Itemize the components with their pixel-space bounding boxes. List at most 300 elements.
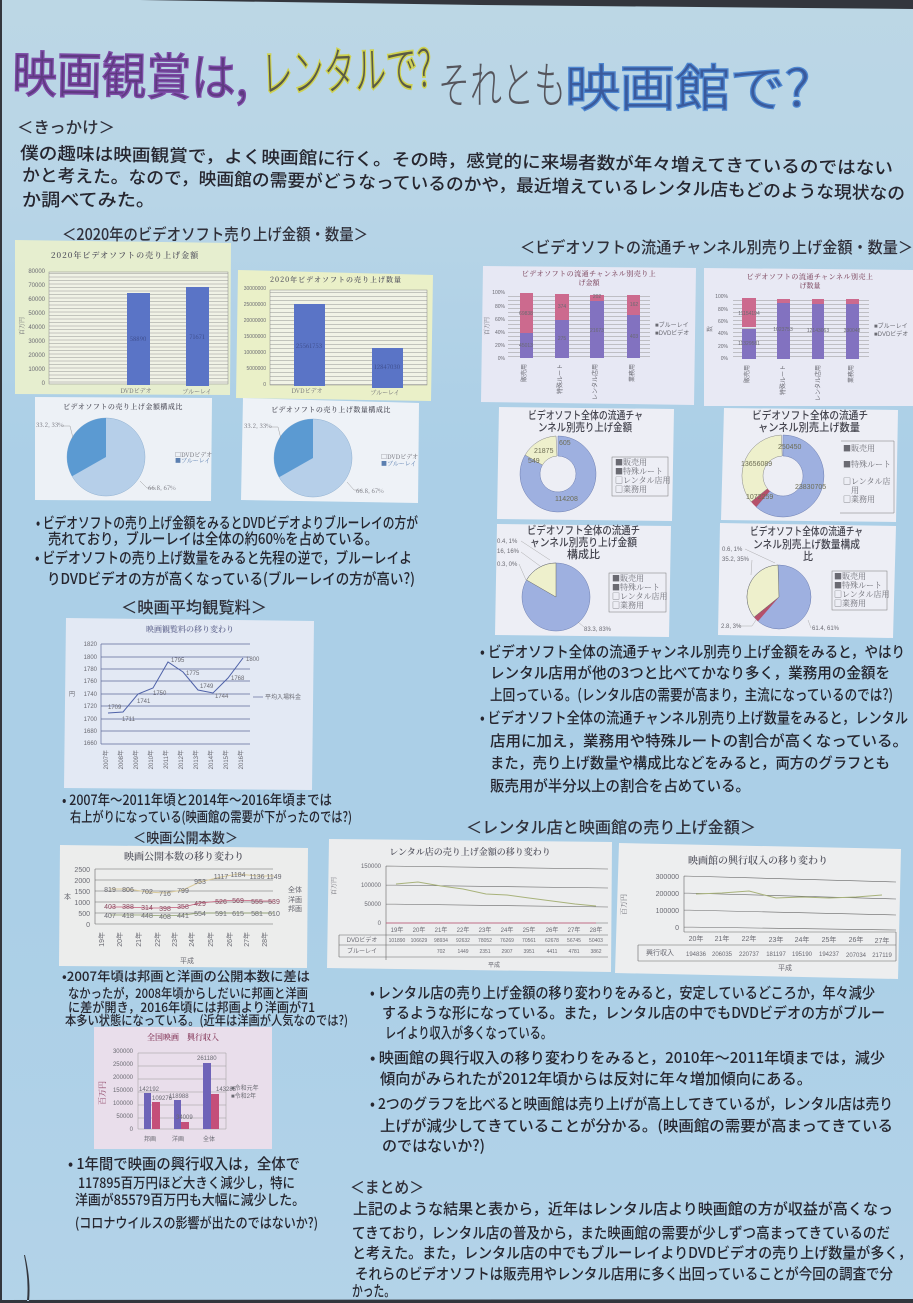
- bar chart: 2020 sales amount: 2020年ビデオソフトの売り上げ金額: [51, 250, 199, 261]
- pie chart: sales amount share: ■ブルーレイ: [175, 456, 210, 465]
- bar chart: box office: 100000: [113, 1101, 134, 1107]
- line chart: film releases: 1000: [74, 900, 90, 907]
- line chart: ticket price: 2011年: [162, 750, 170, 769]
- text: ticket price note: [62, 790, 352, 827]
- line chart: ticket price: 2008年: [117, 750, 125, 769]
- line chart: film releases: 358: [177, 904, 189, 911]
- stacked bar chart: channel amount: 21673: [590, 328, 604, 334]
- line chart with table: rental sales: 22年: [457, 926, 469, 934]
- stacked bar chart: channel quantity: レンタル店用: [814, 365, 822, 401]
- line chart: ticket price: 1768: [231, 676, 245, 682]
- line chart: film releases: 953: [194, 879, 206, 886]
- heading: きっかけ: ＜きっかけ＞: [17, 114, 115, 138]
- line chart with table: cinema revenue: 300000: [656, 874, 679, 881]
- line chart: ticket price: 2016年: [237, 750, 245, 769]
- line chart with table: cinema revenue: 0: [675, 925, 679, 932]
- donut chart: channel quantity: □レンタル店: [843, 476, 890, 487]
- line chart: film releases: 邦画: [288, 904, 302, 913]
- donut chart: channel amount: ビデオソフト全体の流通チャ: [528, 407, 643, 423]
- stacked bar chart: channel quantity: 業務用: [847, 365, 855, 383]
- heading: film releases: ＜映画公開本数＞: [133, 828, 238, 848]
- pie chart: sales quantity share: 33.2, 33%: [244, 421, 272, 430]
- pie chart: channel amount share: 0.3, 0%: [497, 562, 518, 568]
- line chart with table: rental sales: 23年: [479, 926, 491, 934]
- heading: rental and cinema revenue: ＜レンタル店と映画館の売り上げ金額＞: [466, 814, 756, 838]
- pie chart: channel amount share: ■特殊ルート: [612, 582, 660, 593]
- line chart with table: rental sales: 28年: [590, 926, 602, 934]
- section: きっかけ: [17, 114, 905, 212]
- text: film release notes: •2007年頃は邦画と洋画の公開本数に差は: [62, 966, 310, 985]
- stacked bar chart: channel quantity: 330048: [844, 328, 861, 334]
- text: film release notes: 本多い状態になっている。(近年は洋画が人気なのでは?): [65, 1010, 348, 1029]
- stacked bar chart: channel amount: 0%: [498, 356, 506, 362]
- stacked bar chart: channel quantity: 11329581: [738, 341, 760, 347]
- line chart: ticket price: 2009年: [132, 750, 140, 769]
- line chart: ticket price: 1820: [84, 642, 98, 648]
- line chart with table: cinema revenue: 207034: [846, 953, 867, 959]
- bar chart: 2020 sales quantity: DVDビデオ: [291, 386, 323, 395]
- line chart: ticket price: 2015年: [222, 750, 230, 769]
- bar chart: 2020 sales quantity: 0: [263, 382, 266, 388]
- line chart: film releases: 388: [122, 904, 134, 911]
- line chart: film releases: 539: [268, 899, 280, 906]
- line chart: ticket price: 1709: [108, 705, 122, 711]
- line chart with table: cinema revenue: 映画館の興行収入の移り変わり: [688, 852, 828, 867]
- bar chart: 2020 sales amount: 70000: [28, 283, 46, 289]
- donut chart: channel quantity: ■販売用: [843, 443, 875, 454]
- text: film release notes: なかったが，2008年頃からしだいに邦画と洋画: [68, 983, 308, 1002]
- line chart: ticket price: 1749: [200, 684, 214, 690]
- line chart: ticket price: 2012年: [177, 750, 185, 769]
- donut chart: channel quantity: 13656089: [741, 461, 772, 468]
- line chart with table: rental sales: 78052: [478, 938, 492, 944]
- stacked bar chart: channel amount: 80%: [495, 304, 506, 310]
- stacked bar chart: channel amount: レンタル店用: [591, 364, 599, 400]
- bar chart: box office: 全体: [203, 1135, 215, 1143]
- line chart: film releases: 1184: [230, 872, 246, 879]
- line chart: film releases: 591: [215, 911, 227, 918]
- line chart: ticket price: 1795: [171, 658, 185, 664]
- title: レンタルで?: [260, 29, 432, 107]
- bar chart: 2020 sales quantity: 12847030: [374, 362, 401, 371]
- line chart: ticket price: 1800: [84, 655, 98, 661]
- line chart: film releases: 403: [104, 904, 116, 911]
- donut chart: channel amount: 605: [559, 440, 571, 447]
- bar chart: 2020 sales amount: [15, 240, 231, 396]
- bar chart: 2020 sales amount: 60000: [28, 297, 46, 303]
- stacked bar chart: channel quantity: 60%: [718, 319, 729, 325]
- intro text: 僕の趣味は映画観賞で，よく映画館に行く。その時，感覚的に来場者数が年々増えてきているのではない: [20, 140, 893, 180]
- pie chart: channel amount share: ャンネル別売り上げ金額: [530, 535, 637, 549]
- stacked bar chart: channel amount: 20%: [495, 343, 506, 349]
- line chart: film releases: 2500: [74, 867, 90, 874]
- line chart: ticket price: 1740: [84, 692, 98, 698]
- line chart: film releases: 407: [104, 913, 116, 920]
- stacked bar chart: channel quantity: 40%: [718, 331, 729, 337]
- pie chart: sales quantity share: □DVDビデオ: [381, 452, 418, 461]
- line chart with table: rental sales: ブルーレイ: [347, 947, 377, 955]
- donut chart: channel quantity: ■特殊ルート: [843, 459, 891, 470]
- line chart with table: rental sales: 4411: [547, 949, 558, 955]
- line chart with table: cinema revenue: 22年: [742, 934, 756, 943]
- bar chart: 2020 sales amount: 20000: [28, 353, 46, 359]
- line chart with table: cinema revenue: 百万円: [619, 894, 629, 915]
- bar chart: 2020 sales quantity: 2020年ビデオソフトの売り上げ数量: [270, 275, 402, 285]
- line chart: film releases: 1136: [249, 874, 265, 881]
- line chart with table: rental sales: 27年: [568, 926, 580, 934]
- pie chart: channel amount share: [495, 523, 671, 637]
- stacked bar chart: channel quantity: [704, 268, 913, 406]
- line chart: ticket price: [64, 618, 314, 790]
- line chart: film releases: 555: [251, 899, 263, 906]
- text: box office note: 117895百万円ほど大きく減少し，特に: [78, 1173, 295, 1193]
- title: 映画館で?: [565, 49, 810, 121]
- line chart: ticket price: 1741: [137, 699, 151, 705]
- line chart with table: rental sales: 20年: [413, 926, 425, 934]
- stacked bar chart: channel amount: ■DVDビデオ: [655, 329, 689, 337]
- text: box office note: [68, 1153, 318, 1233]
- bar chart: 2020 sales amount: DVDビデオ: [120, 386, 152, 395]
- line chart: film releases: 27年: [242, 932, 251, 947]
- bar chart: box office: 300000: [113, 1049, 134, 1055]
- bar chart: box office: 0: [130, 1127, 134, 1133]
- line chart with table: rental sales: 98934: [434, 938, 448, 944]
- line chart with table: rental sales: 62678: [545, 938, 559, 944]
- stacked bar chart: channel amount: [481, 266, 696, 405]
- donut chart: channel amount: ンネル別売り上げ金額: [538, 419, 632, 435]
- stacked bar chart: channel amount: 特殊ルート: [556, 364, 564, 394]
- line chart with table: cinema revenue: 興行収入: [646, 948, 674, 957]
- line chart: film releases: 500: [78, 911, 90, 918]
- line chart: film releases: 全体: [288, 885, 302, 894]
- stacked bar chart: channel amount: 69838: [519, 311, 533, 317]
- donut chart: channel quantity: [721, 407, 898, 522]
- donut chart: channel amount: 114208: [555, 496, 578, 503]
- line chart: ticket price: 映画観覧料の移り変わり: [146, 624, 234, 635]
- bar chart: 2020 sales amount: ブルーレイ: [182, 387, 212, 396]
- line chart: ticket price: 1800: [246, 657, 260, 663]
- line chart with table: rental sales: 100000: [361, 883, 382, 889]
- stacked bar chart: channel amount: 100%: [492, 290, 506, 296]
- text: box office note: • 1年間で映画の興行収入は，全体で: [68, 1153, 300, 1174]
- text: ticket price note: 右上がりになっている(映画館の需要が下がったのでは?): [70, 807, 352, 827]
- bar chart: 2020 sales quantity: 5000000: [247, 366, 266, 372]
- bar chart: 2020 sales quantity: 20000000: [244, 318, 266, 324]
- line chart: ticket price: 1744: [215, 694, 229, 700]
- line chart with table: rental sales: 56745: [567, 938, 581, 944]
- pie chart: channel quantity share: 2.8, 3%: [721, 624, 742, 630]
- donut chart: channel amount: 549: [528, 458, 540, 465]
- stacked bar chart: channel amount: 60%: [495, 317, 506, 323]
- line chart: film releases: 25年: [206, 932, 215, 947]
- line chart with table: cinema revenue: 194836: [686, 952, 707, 958]
- bar chart: box office: 250000: [113, 1062, 134, 1068]
- line chart: film releases: 314: [141, 905, 153, 912]
- pie chart: channel quantity share: ■販売用: [834, 571, 866, 582]
- stacked bar chart: channel quantity: 100%: [715, 294, 729, 300]
- line chart with table: rental sales: 3951: [523, 949, 535, 955]
- pie chart: channel amount share: □業務用: [612, 600, 644, 611]
- line chart: film releases: 581: [251, 911, 263, 918]
- pie chart: sales amount share: □DVDビデオ: [175, 450, 212, 459]
- line chart with table: rental sales: 平成: [488, 961, 500, 969]
- line chart: film releases: 1500: [74, 889, 90, 896]
- bar chart: box office: ■令和元年: [231, 1084, 259, 1092]
- line chart: ticket price: 2014年: [207, 750, 215, 769]
- stacked bar chart: channel quantity: ■DVDビデオ: [874, 330, 908, 338]
- intro text: か調べてみた。: [22, 187, 155, 212]
- text: channel notes: また，売り上げ数量や構成比などをみると，両方のグラフとも: [490, 752, 890, 773]
- line chart with table: rental sales: 26年: [546, 926, 558, 934]
- bar chart: 2020 sales amount: 71671: [189, 332, 205, 341]
- line chart: film releases: 21年: [134, 932, 143, 947]
- line chart with table: rental sales: 702: [437, 949, 445, 955]
- line chart with table: rental sales: 1449: [457, 949, 469, 955]
- line chart with table: cinema revenue: 27年: [875, 936, 889, 945]
- text: ticket price note: • 2007年～2011年頃と2014年～2016年頃までは: [62, 790, 332, 810]
- conclusion text: 上記のような結果と表から，近年はレンタル店より映画館の方が収益が高くなっ: [353, 1198, 893, 1219]
- title: それとも: [438, 46, 566, 118]
- bar chart: box office: ■令和2年: [231, 1092, 256, 1100]
- stacked bar chart: channel quantity: 20%: [718, 344, 729, 350]
- text: rental and cinema notes: [370, 982, 893, 1156]
- bar chart: box office: 邦画: [144, 1135, 156, 1143]
- line chart: film releases: 1149: [266, 874, 282, 881]
- donut chart: channel quantity: 1072259: [746, 494, 773, 501]
- text: sales notes: • ビデオソフトの売り上げ金額をみるとDVDビデオよりブルーレイの方が: [36, 512, 418, 533]
- text: sales notes: 売れており，ブルーレイは全体の約60%を占めている。: [48, 528, 378, 549]
- line chart: film releases: 洋画: [288, 895, 302, 904]
- bar chart: box office: 261180: [197, 1056, 217, 1062]
- bar chart: box office: [94, 1027, 272, 1149]
- text: channel notes: レンタル店用が他の3つと比べてかなり多く，業務用の金額を: [490, 662, 890, 683]
- stacked bar chart: channel amount: 45013: [519, 343, 533, 349]
- bar chart: 2020 sales quantity: 25561753: [296, 341, 322, 350]
- heading: まとめ: ＜まとめ＞: [350, 1174, 424, 1198]
- text: channel notes: [480, 641, 908, 796]
- text: film release notes: に差が開き，2016年頃には邦画より洋画が71: [68, 997, 315, 1016]
- pie chart: channel quantity share: 0.6, 1%: [722, 547, 743, 553]
- pie chart: channel amount share: 83.3, 83%: [584, 627, 612, 633]
- bar chart: 2020 sales amount: 50000: [28, 311, 46, 317]
- stacked bar chart: channel amount: 業務用: [628, 364, 636, 382]
- pie chart: channel quantity share: ビデオソフト全体の流通チャ: [750, 524, 863, 538]
- pie chart: sales quantity share: ビデオソフトの売り上げ数量構成比: [271, 405, 391, 415]
- line chart: film releases: 408: [159, 914, 171, 921]
- donut chart: channel amount: ■販売用: [615, 457, 647, 468]
- line chart: film releases: 806: [122, 887, 134, 894]
- text: channel notes: 販売用が半分以上の割合を占めている。: [490, 775, 750, 796]
- stacked bar chart: channel quantity: 特殊ルート: [779, 365, 787, 395]
- pie chart: sales amount share: 66.8, 67%: [148, 483, 176, 492]
- line chart: film releases: [59, 845, 308, 968]
- line chart with table: cinema revenue: 100000: [656, 908, 679, 915]
- text: rental and cinema notes: のではないか?): [382, 1135, 485, 1156]
- line chart with table: rental sales: 24年: [501, 926, 513, 934]
- pie chart: sales amount share: ビデオソフトの売り上げ金額構成比: [63, 402, 183, 412]
- donut chart: channel amount: ■特殊ルート: [615, 466, 663, 477]
- bar chart: box office: 百万円: [97, 1081, 108, 1105]
- line chart: ticket price: 1711: [122, 717, 136, 723]
- line chart: film releases: 610: [268, 911, 280, 918]
- line chart with table: cinema revenue: 26年: [849, 935, 863, 944]
- text: sales notes: りDVDビデオの方が高くなっている(ブルーレイの方が高い?): [47, 568, 415, 589]
- line chart: ticket price: 円: [69, 691, 75, 698]
- bar chart: 2020 sales quantity: 25000000: [244, 302, 266, 308]
- line chart with table: cinema revenue: 23年: [769, 935, 783, 944]
- line chart with table: cinema revenue: 220737: [739, 952, 760, 958]
- line chart: film releases: 22年: [153, 932, 162, 947]
- stacked bar chart: channel amount: 374: [558, 304, 566, 310]
- stacked bar chart: channel quantity: 1023753: [773, 327, 793, 333]
- line chart: film releases: 819: [104, 887, 116, 894]
- pie chart: channel amount share: 構成比: [567, 547, 600, 561]
- line chart: film releases: 20年: [115, 932, 124, 947]
- line chart: ticket price: 2007年: [102, 750, 110, 769]
- pie chart: channel quantity share: ■特殊ルート: [834, 580, 882, 591]
- line chart with table: rental sales: レンタル店の売り上げ金額の移り変わり: [389, 845, 551, 858]
- line chart with table: rental sales: 21年: [435, 926, 447, 934]
- line chart with table: rental sales: 百万円: [329, 877, 338, 895]
- bar chart: box office: 50000: [116, 1114, 134, 1120]
- stacked bar chart: channel amount: 40%: [495, 330, 506, 336]
- stacked bar chart: channel quantity: 0%: [721, 356, 729, 362]
- line chart with table: cinema revenue: 181197: [766, 952, 786, 958]
- line chart: film releases: 702: [141, 889, 153, 896]
- line chart: film releases: 24年: [187, 932, 196, 947]
- title: [12, 29, 810, 121]
- pie chart: channel amount share: ビデオソフト全体の流通チ: [527, 523, 640, 537]
- text: channel notes: 店用に加え，業務用や特殊ルートの割合が高くなっている。: [490, 730, 908, 751]
- line chart: film releases: 28年: [260, 932, 269, 947]
- bar chart: box office: 洋画: [172, 1135, 184, 1143]
- line chart: film releases: 716: [159, 891, 171, 898]
- bar chart: 2020 sales quantity: 10000000: [244, 350, 266, 356]
- stacked bar chart: channel amount: 162: [630, 302, 638, 308]
- line chart with table: cinema revenue: 平成: [778, 963, 792, 972]
- donut chart: channel quantity: 用: [851, 485, 859, 496]
- heading: average ticket price: ＜映画平均観覧料＞: [121, 594, 267, 618]
- bar chart: 2020 sales amount: 40000: [28, 325, 46, 331]
- line chart with table: rental sales: 150000: [361, 864, 382, 870]
- line chart with table: rental sales: 92632: [456, 938, 470, 944]
- donut chart: channel amount: □レンタル店用: [615, 475, 670, 486]
- bar chart: 2020 sales amount: 58890: [130, 334, 147, 343]
- intro text: かと考えた。なので，映画館の需要がどうなっているのかや，最近増えているレンタル店もどのような現状なの: [22, 162, 905, 205]
- title: 映画観賞は,: [12, 35, 249, 111]
- text: rental and cinema notes: 上げが減少してきていることが分かる。(映画館の需要が高まってきている: [380, 1115, 893, 1136]
- line chart with table: rental sales: 2351: [479, 949, 491, 955]
- text: film release notes: [62, 966, 348, 1029]
- line chart: ticket price: 2013年: [192, 750, 200, 769]
- bar chart: box office: 143285: [216, 1087, 237, 1093]
- bar chart: 2020 sales amount: 0: [42, 381, 46, 387]
- line chart with table: rental sales: [327, 839, 612, 972]
- stacked bar chart: channel amount: 百万円: [482, 317, 491, 335]
- stacked bar chart: channel amount: ビデオソフトの流通チャンネル別売り上: [522, 269, 656, 279]
- pie chart: channel quantity share: [718, 523, 896, 638]
- line chart: ticket price: 1775: [186, 671, 200, 677]
- line chart with table: rental sales: 25年: [523, 926, 535, 934]
- stacked bar chart: channel amount: 202: [593, 294, 601, 300]
- line chart with table: rental sales: 50000: [364, 902, 382, 908]
- stacked bar chart: channel quantity: 販売用: [743, 365, 751, 383]
- pie chart: sales amount share: 33.2, 33%: [36, 420, 64, 429]
- line chart: ticket price: 1680: [84, 729, 98, 735]
- line chart with table: rental sales: 19年: [391, 926, 403, 934]
- line chart: film releases: 554: [194, 911, 206, 918]
- line chart with table: cinema revenue: 195190: [792, 952, 813, 958]
- pie chart: channel quantity share: 35.2, 35%: [722, 557, 750, 563]
- pie chart: sales amount share: [35, 397, 212, 501]
- line chart: film releases: 23年: [170, 932, 179, 947]
- line chart with table: rental sales: DVDビデオ: [347, 936, 377, 944]
- pie chart: channel quantity share: 比: [803, 550, 813, 563]
- bar chart: box office: 142192: [139, 1087, 160, 1093]
- pie chart: sales quantity share: 66.8, 67%: [356, 486, 384, 495]
- bar chart: 2020 sales quantity: 15000000: [244, 334, 266, 340]
- conclusion text: [352, 1198, 912, 1301]
- bar chart: 2020 sales quantity: ブルーレイ: [370, 388, 400, 397]
- pie chart: channel amount share: □レンタル店用: [612, 591, 667, 602]
- bar chart: 2020 sales amount: 百万円: [17, 317, 26, 335]
- donut chart: channel amount: [497, 407, 674, 521]
- text: rental and cinema notes: • 映画館の興行収入の移り変わりをみると，2010年～2011年頃までは，減少: [370, 1047, 885, 1068]
- line chart: ticket price: 2010年: [147, 750, 155, 769]
- line chart: film releases: 本: [64, 892, 71, 901]
- line chart: ticket price: 1720: [84, 704, 98, 710]
- line chart: film releases: 398: [159, 906, 171, 913]
- line chart: ticket price: 1760: [84, 679, 98, 685]
- line chart with table: rental sales: 2907: [501, 949, 513, 955]
- line chart: film releases: 429: [194, 901, 206, 908]
- bar chart: box office: 109276: [152, 1096, 173, 1102]
- pie chart: channel amount share: ■販売用: [612, 573, 644, 584]
- line chart: film releases: 569: [232, 898, 244, 905]
- line chart with table: cinema revenue: 200000: [656, 891, 679, 898]
- line chart: ticket price: 1660: [84, 741, 98, 747]
- line chart with table: rental sales: 76269: [500, 938, 514, 944]
- line chart: ticket price: 1750: [153, 691, 167, 697]
- line chart: film releases: 0: [86, 922, 90, 929]
- stacked bar chart: channel quantity: げ数量: [800, 281, 820, 291]
- line chart with table: rental sales: 0: [378, 921, 382, 927]
- text: rental and cinema notes: 傾向がみられたが2012年頃からは反対に年々増加傾向にある。: [380, 1068, 812, 1089]
- line chart: ticket price: 1700: [84, 717, 98, 723]
- line chart with table: rental sales: 3862: [590, 949, 602, 955]
- donut chart: channel quantity: 23830705: [795, 484, 826, 491]
- donut chart: channel quantity: ビデオソフト全体の流通チ: [752, 407, 868, 423]
- line chart: film releases: 418: [122, 913, 134, 920]
- bar chart: 2020 sales amount: 80000: [28, 269, 46, 275]
- text: sales notes: [35, 512, 418, 589]
- stacked bar chart: channel quantity: 12143063: [807, 328, 829, 334]
- pie chart: channel amount share: 0.4, 1%: [497, 539, 518, 545]
- line chart: film releases: 615: [232, 911, 244, 918]
- pie chart: channel amount share: 16, 16%: [497, 549, 520, 555]
- stacked bar chart: channel amount: ■ブルーレイ: [655, 321, 689, 329]
- line chart: ticket price: 1780: [84, 667, 98, 673]
- bar chart: box office: 34009: [176, 1115, 193, 1121]
- line chart: ticket price: 平均入場料金: [265, 693, 301, 701]
- donut chart: channel quantity: ャンネル別売上げ数量: [758, 419, 860, 435]
- bar chart: box office: 全国映画 興行収入: [147, 1032, 219, 1043]
- line chart: film releases: 映画公開本数の移り変わり: [124, 848, 244, 863]
- pie chart: channel quantity share: □レンタル店用: [834, 589, 889, 600]
- line chart with table: cinema revenue: 217119: [872, 953, 892, 959]
- bar chart: box office: 200000: [113, 1075, 134, 1081]
- stacked bar chart: channel quantity: 数: [705, 326, 714, 332]
